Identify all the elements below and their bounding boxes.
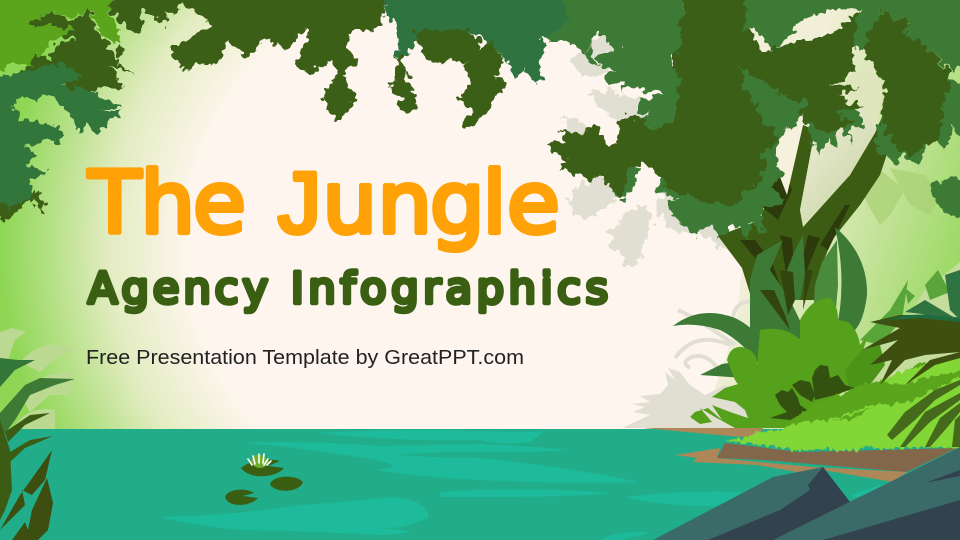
gap between branches bbox=[770, 60, 882, 225]
subtitle: Infographics bbox=[291, 264, 608, 314]
dark leaf veins bbox=[760, 270, 813, 330]
main tree back fringe bbox=[610, 75, 960, 240]
tagline: Free Presentation Template by GreatPPT.com bbox=[86, 347, 524, 369]
right palm fronds bbox=[862, 270, 960, 385]
teal top foliage bbox=[383, 0, 568, 85]
title: The bbox=[88, 154, 246, 254]
subtitle: Agency bbox=[88, 264, 268, 314]
rocks bbox=[653, 447, 960, 540]
tree trunk bbox=[718, 77, 905, 300]
background silhouette leaves bbox=[560, 25, 725, 266]
bright green bush bbox=[690, 298, 885, 428]
right lower fronds bbox=[887, 380, 960, 447]
left green foliage bbox=[0, 62, 122, 208]
water lily flower bbox=[248, 454, 271, 468]
pale left leaves bbox=[0, 328, 75, 430]
title: ungle bbox=[322, 154, 560, 254]
grass layers bbox=[727, 355, 960, 451]
main tree medium green foliage bbox=[545, 0, 960, 132]
main tree dark foliage bbox=[549, 0, 950, 205]
top left light leaves bbox=[0, 0, 133, 77]
dark bush leaves bbox=[770, 365, 855, 420]
hanging dark foliage bbox=[0, 0, 507, 220]
title bbox=[88, 154, 560, 254]
lake bbox=[0, 429, 960, 540]
lily pads bbox=[225, 460, 303, 505]
shore bbox=[643, 428, 957, 482]
left plant bbox=[0, 358, 75, 540]
title: J bbox=[278, 156, 321, 252]
water ripples bbox=[160, 430, 890, 540]
big base leaves bbox=[673, 227, 908, 383]
right background foliage bbox=[855, 168, 940, 225]
background bush silhouette bbox=[622, 301, 760, 428]
subtitle bbox=[88, 264, 608, 314]
